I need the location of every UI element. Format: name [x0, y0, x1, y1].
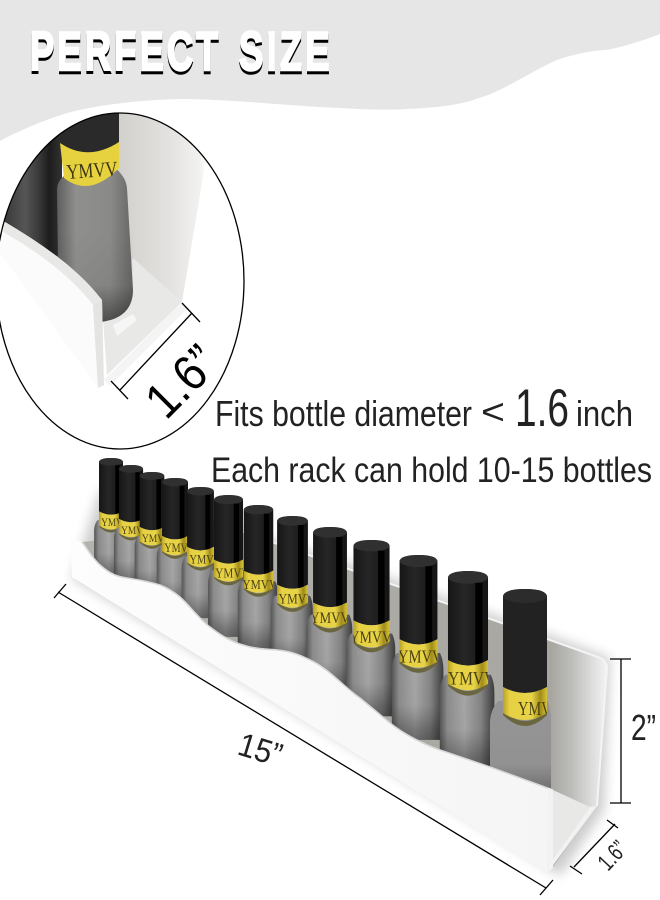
bottle row: [94, 458, 562, 804]
title: [30, 20, 333, 82]
bottle 10: YMVV: [349, 628, 392, 647]
bottle 11: YMVV: [398, 647, 443, 667]
bottle 2: YMVV: [121, 525, 150, 537]
bottle 11: [392, 555, 443, 740]
bottle 4: YMVV: [164, 541, 195, 555]
close-up front wall: [5, 222, 102, 320]
bottle 8: YMVV: [279, 592, 315, 608]
rack soft shadow: [72, 490, 610, 876]
description line 1: 1.6: [515, 379, 569, 438]
description line 1: [215, 379, 633, 438]
title: SIZE: [239, 20, 333, 82]
bottle 6: [208, 495, 250, 637]
length label: 15”: [234, 725, 287, 774]
rack floor at right end: [550, 790, 590, 863]
rack end edge: [547, 788, 597, 872]
depth label: 1.6”: [593, 836, 633, 876]
close-up gold band: YMVV: [66, 156, 118, 184]
bottle 6: YMVV: [215, 566, 250, 581]
rack back wall: [82, 482, 607, 868]
detail lens: close-up of rack depth: [0, 100, 244, 449]
bottle 13: [490, 589, 551, 788]
bottle 3: [134, 472, 166, 584]
close-up bottle cap: [62, 114, 119, 152]
bottle 2: [114, 465, 146, 578]
length dimension line: [54, 584, 553, 895]
bottle 9: [306, 527, 352, 693]
bottle 5: [182, 487, 218, 618]
bottle 7: YMVV: [242, 577, 277, 593]
bottle 1: YMVV: [101, 517, 130, 529]
bottle 3: YMVV: [142, 532, 171, 545]
depth dimension line: [570, 820, 618, 874]
close-up gold band: [60, 142, 119, 186]
rack wavy front wall: [70, 538, 553, 872]
lens outline: [0, 113, 244, 449]
bottle 12: [440, 571, 495, 767]
bottle 8: [270, 516, 313, 658]
bottle 12: YMVV: [448, 669, 495, 690]
height dimension line: [610, 659, 631, 803]
depth dimension 1.6 in lens: 1.6”: [134, 334, 229, 429]
bottle 10: [346, 540, 395, 716]
header banner: [0, 0, 660, 141]
description line 1: Fits bottle diameter: [215, 393, 472, 434]
bottle 13: YMVV: [518, 698, 562, 720]
bottle 9: YMVV: [310, 610, 350, 627]
description line 1: inch: [576, 393, 633, 434]
depth dimension 1.6 in lens: [111, 303, 229, 429]
bottle 7: [238, 505, 278, 649]
close-up bottle body: [57, 168, 133, 322]
bottle 1: [94, 458, 125, 574]
description line 1: <: [481, 391, 505, 432]
title: PERFECT: [30, 20, 222, 82]
bottle 5: YMVV: [190, 552, 222, 566]
rack with bottles: [70, 458, 610, 876]
close-up interior: [0, 100, 205, 388]
bottle 4: [156, 478, 190, 598]
rack top lip: [82, 542, 553, 790]
